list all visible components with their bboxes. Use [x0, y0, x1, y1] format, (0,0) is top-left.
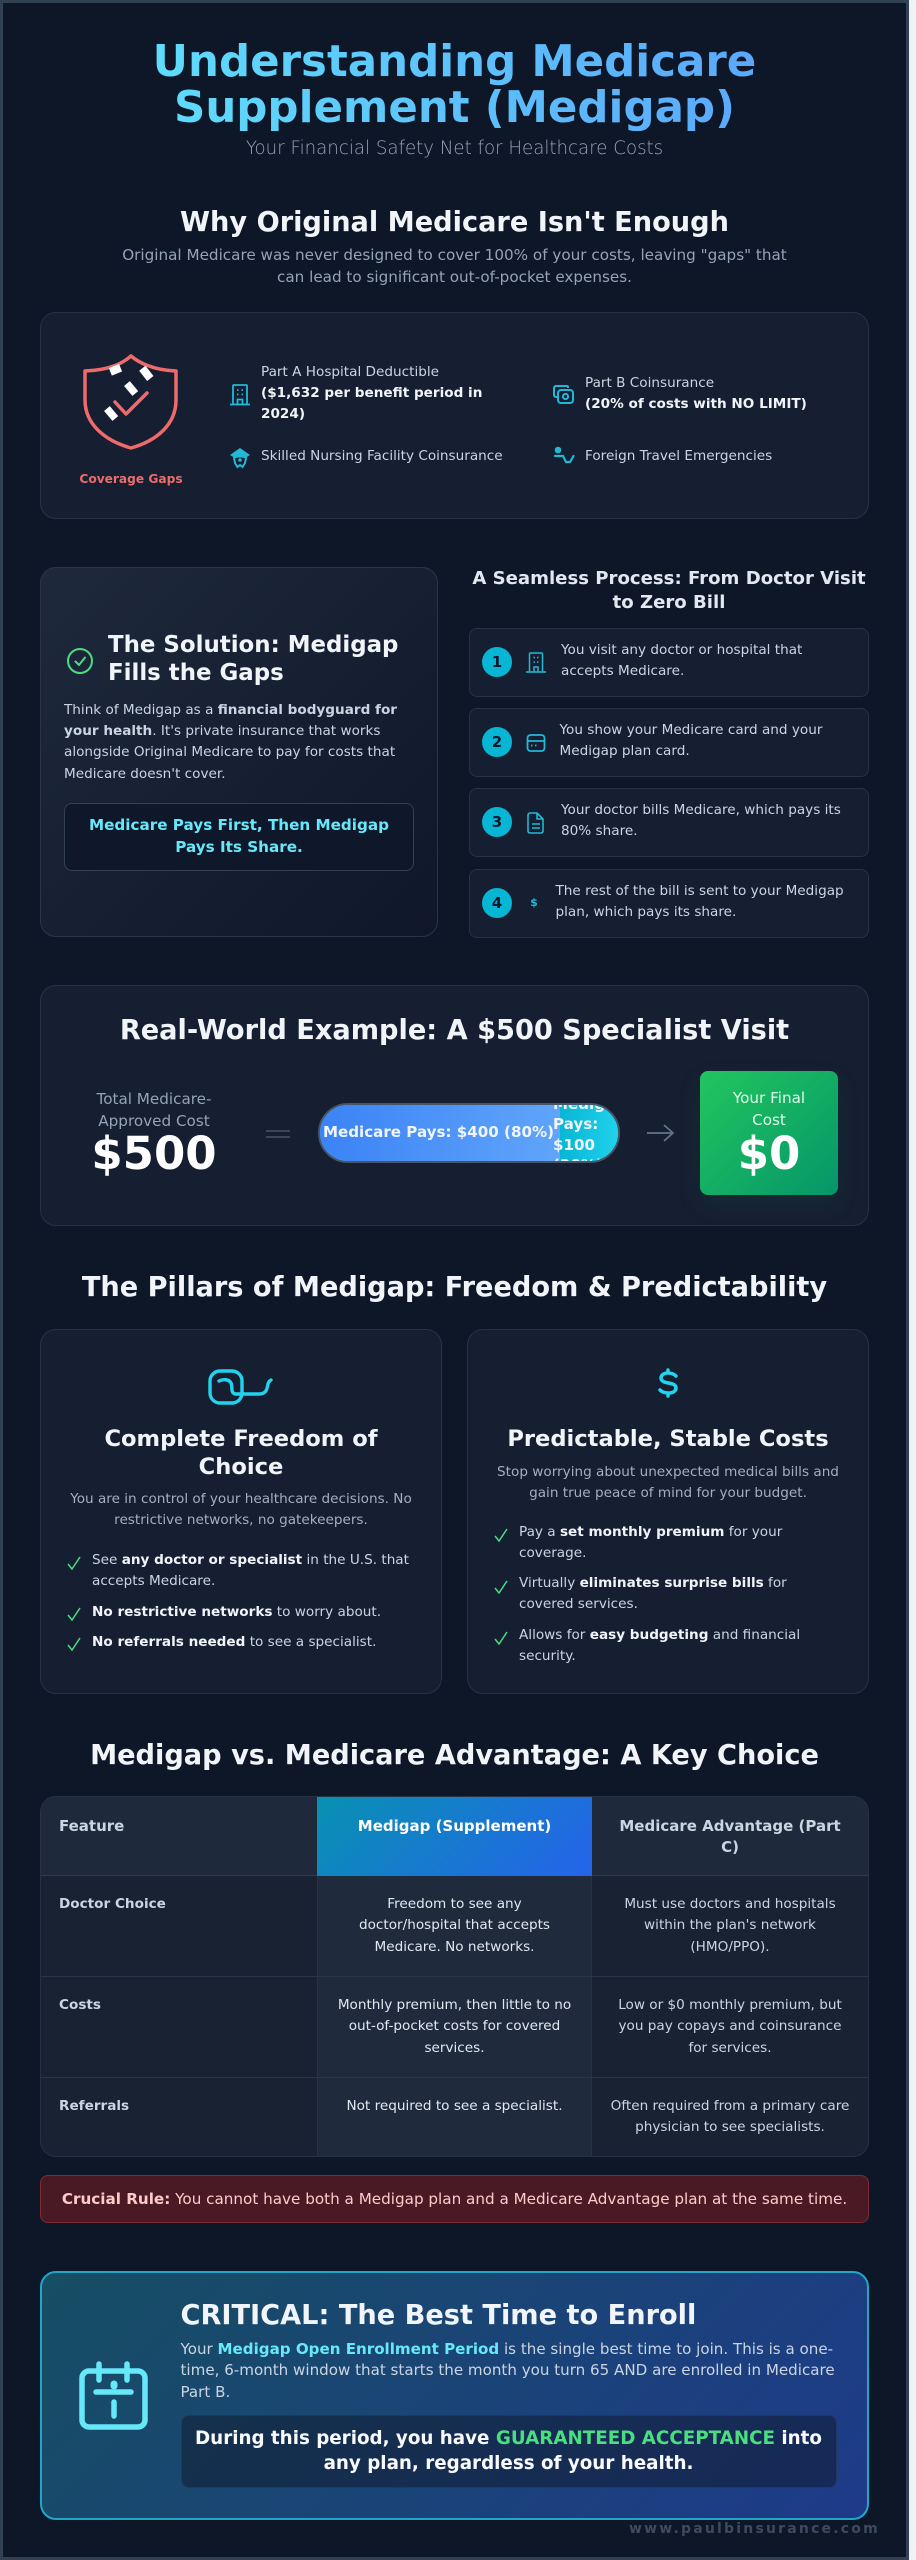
- freedom heading: Complete Freedom of: [104, 1426, 378, 1452]
- check 1: [494, 1528, 508, 1542]
- icon: broken shield: [83, 354, 178, 450]
- cell: advantage referrals: physician to see specialists.: [635, 2119, 825, 2135]
- guaranteed acceptance callout: During this period, you have GUARANTEED ACCEPTANCE into: [195, 2428, 822, 2449]
- step 1 number: 1: [492, 653, 502, 671]
- callout: crucial rule: Crucial Rule: You cannot have both a Medigap plan and a Medicare Advantage plan at the same time.: [62, 2190, 847, 2208]
- cell: advantage costs: you pay copays and coinsurance: [618, 2018, 841, 2034]
- cell: medigap doctor choice: Freedom to see any: [387, 1896, 522, 1912]
- solution text: your health. It's private insurance that works: [64, 723, 380, 739]
- item: skilled nursing: Skilled Nursing Facility Coinsurance: [261, 448, 503, 464]
- step 2 text: [560, 722, 822, 759]
- enroll heading: CRITICAL: The Best Time to Enroll: [180, 2300, 696, 2331]
- equals sign: [266, 1130, 290, 1138]
- stacked payment bar: [318, 1103, 620, 1163]
- icon: check circle: [67, 648, 93, 674]
- panel: the solution: [40, 567, 438, 937]
- guaranteed acceptance callout: [180, 2415, 836, 2488]
- freedom heading: [104, 1426, 378, 1480]
- cell: advantage doctor choice: within the plan's network: [644, 1917, 816, 1933]
- step 1 number: [482, 647, 512, 677]
- medigap share: [560, 1103, 622, 1163]
- medicare share: [318, 1103, 560, 1163]
- item: part b: (20% of costs with NO LIMIT): [585, 396, 807, 412]
- item: part a: [261, 364, 482, 422]
- title: [153, 37, 756, 133]
- cell: advantage doctor choice: Must use doctors and hospitals: [624, 1896, 836, 1912]
- solution text: Medicare doesn't cover.: [64, 766, 226, 782]
- icon: graduation cap: [230, 448, 250, 468]
- header cell: medigap: [317, 1797, 592, 1876]
- freedom heading: Choice: [199, 1454, 283, 1480]
- step 2 number: [482, 727, 512, 757]
- watermark: www.paulbinsurance.com: [629, 2521, 880, 2537]
- final cost label: Cost: [752, 1110, 786, 1128]
- medigap share label: [553, 1103, 620, 1163]
- icon: hospital: [230, 384, 250, 406]
- step 4 number: 4: [492, 894, 502, 912]
- check list: stable costs: [494, 1524, 800, 1664]
- final cost label: Your Final: [733, 1089, 805, 1107]
- freedom text: restrictive networks, no gatekeepers.: [114, 1512, 368, 1528]
- freedom text: You are in control of your healthcare decisions. No: [70, 1491, 412, 1507]
- solution text: Think of Medigap as a financial bodyguard for: [64, 702, 397, 718]
- step 3 number: [482, 807, 512, 837]
- bullet 2: Virtually eliminates surprise bills for: [519, 1575, 787, 1591]
- cell: advantage doctor choice: (HMO/PPO).: [690, 1939, 770, 1955]
- medigap column: [317, 1876, 592, 2158]
- step 3 text: Your doctor bills Medicare, which pays its: [561, 802, 841, 818]
- item: part b: Part B Coinsurance: [585, 374, 714, 390]
- icon: freedom: [208, 1369, 273, 1405]
- step 4 text: plan, which pays its share.: [556, 904, 736, 920]
- panel: freedom: [40, 1329, 442, 1694]
- check list: freedom: [68, 1552, 409, 1652]
- check 2: [494, 1580, 508, 1594]
- icon: travel: [554, 446, 575, 464]
- row label: doctor choice: Doctor Choice: [59, 1896, 166, 1912]
- panel: stable costs: [467, 1329, 869, 1694]
- step 2 text: You show your Medicare card and your: [560, 722, 822, 738]
- step 4: [469, 869, 869, 938]
- bullet 3: security.: [519, 1648, 576, 1664]
- intro text: Original Medicare was never designed to cover 100% of your costs, leaving "gaps" that: [122, 246, 787, 264]
- check 1: [68, 1556, 81, 1570]
- enroll text: [180, 2339, 835, 2403]
- cell: medigap costs: Monthly premium, then little to no: [338, 1997, 571, 2013]
- panel: enroll: [40, 2271, 869, 2520]
- total cost: Total Medicare-: [96, 1090, 212, 1108]
- step 1 icon: [526, 652, 546, 673]
- medigap share label: $100: [553, 1136, 595, 1154]
- item: foreign travel: Foreign Travel Emergencies: [585, 448, 772, 464]
- enroll text: time, 6-month window that starts the month you turn 65 AND are enrolled in Medicare: [180, 2361, 835, 2379]
- row divider 2: [40, 2077, 869, 2078]
- title: Understanding Medicare: [153, 37, 756, 87]
- step 2 number: 2: [492, 733, 502, 751]
- check 3: [68, 1638, 81, 1652]
- header: advantage: [592, 1816, 868, 1859]
- header: medigap: Medigap (Supplement): [358, 1817, 551, 1835]
- step 3 text: 80% share.: [561, 823, 638, 839]
- cell: medigap referrals: Not required to see a specialist.: [346, 2098, 563, 2114]
- step 2 text: Medigap plan card.: [560, 743, 690, 759]
- bullet 1: Pay a set monthly premium for your: [519, 1524, 782, 1540]
- bullet 1: coverage.: [519, 1545, 586, 1561]
- cell: advantage referrals: Often required from a primary care: [611, 2098, 849, 2114]
- item: part a: ($1,632 per benefit period in: [261, 385, 482, 401]
- cell: advantage costs: Low or $0 monthly premium, but: [618, 1997, 842, 2013]
- check 2: [68, 1608, 81, 1622]
- callout: medicare pays first: [64, 803, 414, 871]
- process heading: to Zero Bill: [613, 592, 725, 613]
- callout: crucial rule: [40, 2175, 869, 2223]
- panel: real-world example: [40, 985, 869, 1226]
- coverage gaps label: Coverage Gaps: [79, 472, 183, 486]
- step 4 icon: $: [530, 896, 538, 909]
- step 1 text: [561, 642, 802, 679]
- bullet 3: No referrals needed to see a specialist.: [92, 1634, 376, 1650]
- bullet 2: [519, 1573, 787, 1616]
- callout: medicare pays first: Medicare Pays First, Then Medigap: [89, 816, 389, 834]
- enroll text: Part B.: [180, 2383, 230, 2401]
- solution heading: [108, 632, 398, 686]
- cell: advantage costs: [592, 1995, 868, 2059]
- cell: advantage doctor choice: [592, 1894, 868, 1958]
- icon: dollar: [658, 1368, 678, 1398]
- bullet 2: No restrictive networks to worry about.: [92, 1604, 381, 1620]
- step 4 text: [555, 883, 844, 920]
- heading: pillars: The Pillars of Medigap: Freedom & Predictability: [82, 1272, 827, 1303]
- arrow: [647, 1124, 674, 1142]
- header: advantage: C): [721, 1838, 739, 1856]
- step 3 number: 3: [492, 813, 502, 831]
- heading: why original medicare: Why Original Medicare Isn't Enough: [180, 207, 729, 238]
- stable costs text: [497, 1464, 839, 1501]
- total cost: Approved Cost: [98, 1112, 210, 1130]
- guaranteed acceptance callout: any plan, regardless of your health.: [324, 2452, 693, 2474]
- $500 value: $500: [91, 1127, 217, 1180]
- solution text: alongside Original Medicare to pay for costs that: [64, 744, 395, 760]
- example heading: Real-World Example: A $500 Specialist Visit: [120, 1015, 789, 1046]
- step 1: [469, 628, 869, 696]
- step 3: [469, 788, 869, 856]
- intro text: [122, 246, 787, 286]
- cell: medigap costs: services.: [424, 2040, 485, 2056]
- cell: advantage referrals: [592, 2096, 868, 2139]
- stable costs text: gain true peace of mind for your budget.: [529, 1485, 807, 1501]
- title: Supplement (Medigap): [174, 83, 735, 133]
- bullet 3: Allows for easy budgeting and financial: [519, 1627, 800, 1643]
- cell: medigap doctor choice: doctor/hospital that accepts: [359, 1917, 550, 1933]
- item: part b: [585, 374, 807, 412]
- step 3 icon: [527, 812, 544, 834]
- bullet 1: accepts Medicare.: [92, 1573, 215, 1589]
- final cost label: [732, 1089, 805, 1128]
- medicare share label: Medicare Pays: $400 (80%): [323, 1123, 554, 1141]
- step 4 number: [482, 888, 512, 918]
- header: feature: Feature: [59, 1817, 124, 1835]
- cell: medigap doctor choice: Medicare. No networks.: [374, 1939, 534, 1955]
- step 4 text: The rest of the bill is sent to your Medigap: [556, 883, 844, 899]
- freedom text: [70, 1491, 412, 1528]
- row divider 1: [40, 1976, 869, 1977]
- bullet 1: See any doctor or specialist in the U.S. that: [92, 1552, 409, 1568]
- solution text: [64, 702, 397, 782]
- stable costs text: Stop worrying about unexpected medical bills and: [497, 1464, 839, 1480]
- bullet 1: [519, 1524, 782, 1561]
- step 1 text: You visit any doctor or hospital that: [561, 642, 802, 658]
- step 1 text: accepts Medicare.: [561, 663, 684, 679]
- row label: referrals: Referrals: [59, 2098, 129, 2114]
- stable costs heading: Predictable, Stable Costs: [507, 1426, 829, 1452]
- icon: money: [553, 385, 574, 404]
- medigap share label: Pays:: [553, 1115, 598, 1133]
- header: advantage: Medicare Advantage (Part: [619, 1817, 841, 1835]
- total cost: [96, 1090, 212, 1130]
- step 2 icon: [526, 734, 546, 752]
- step 3 text: [561, 802, 841, 839]
- icon: calendar: [76, 2358, 152, 2434]
- check 3: [494, 1631, 508, 1645]
- comparison table: [40, 1796, 869, 2157]
- step 2: [469, 708, 869, 776]
- item: part a: Part A Hospital Deductible: [261, 364, 439, 380]
- heading: comparison: Medigap vs. Medicare Advantage: A Key Choice: [90, 1740, 819, 1771]
- callout: medicare pays first: Pays Its Share.: [175, 838, 303, 856]
- item: part a: 2024): [261, 406, 305, 422]
- solution heading: Fills the Gaps: [108, 660, 284, 686]
- cell: medigap costs: out-of-pocket costs for covered: [349, 2018, 560, 2034]
- panel: coverage gaps: [40, 312, 869, 519]
- $0 value: $0: [738, 1127, 800, 1180]
- cell: advantage costs: for services.: [688, 2040, 772, 2056]
- final cost panel: [700, 1071, 838, 1195]
- enroll text: Your Medigap Open Enrollment Period is the single best time to join. This is a one-: [180, 2340, 833, 2358]
- cell: medigap doctor choice: [317, 1894, 592, 1958]
- subtitle: Your Financial Safety Net for Healthcare Costs: [246, 138, 663, 159]
- bullet 2: covered services.: [519, 1596, 638, 1612]
- row label: costs: Costs: [59, 1997, 101, 2013]
- process heading: A Seamless Process: From Doctor Visit: [472, 568, 866, 589]
- process heading: [472, 568, 866, 613]
- bullet 1: [92, 1552, 409, 1589]
- header row background: [40, 1796, 869, 1876]
- intro text: can lead to significant out-of-pocket expenses.: [277, 268, 632, 286]
- solution heading: The Solution: Medigap: [108, 632, 398, 658]
- bullet 3: [519, 1625, 800, 1668]
- cell: medigap costs: [317, 1995, 592, 2059]
